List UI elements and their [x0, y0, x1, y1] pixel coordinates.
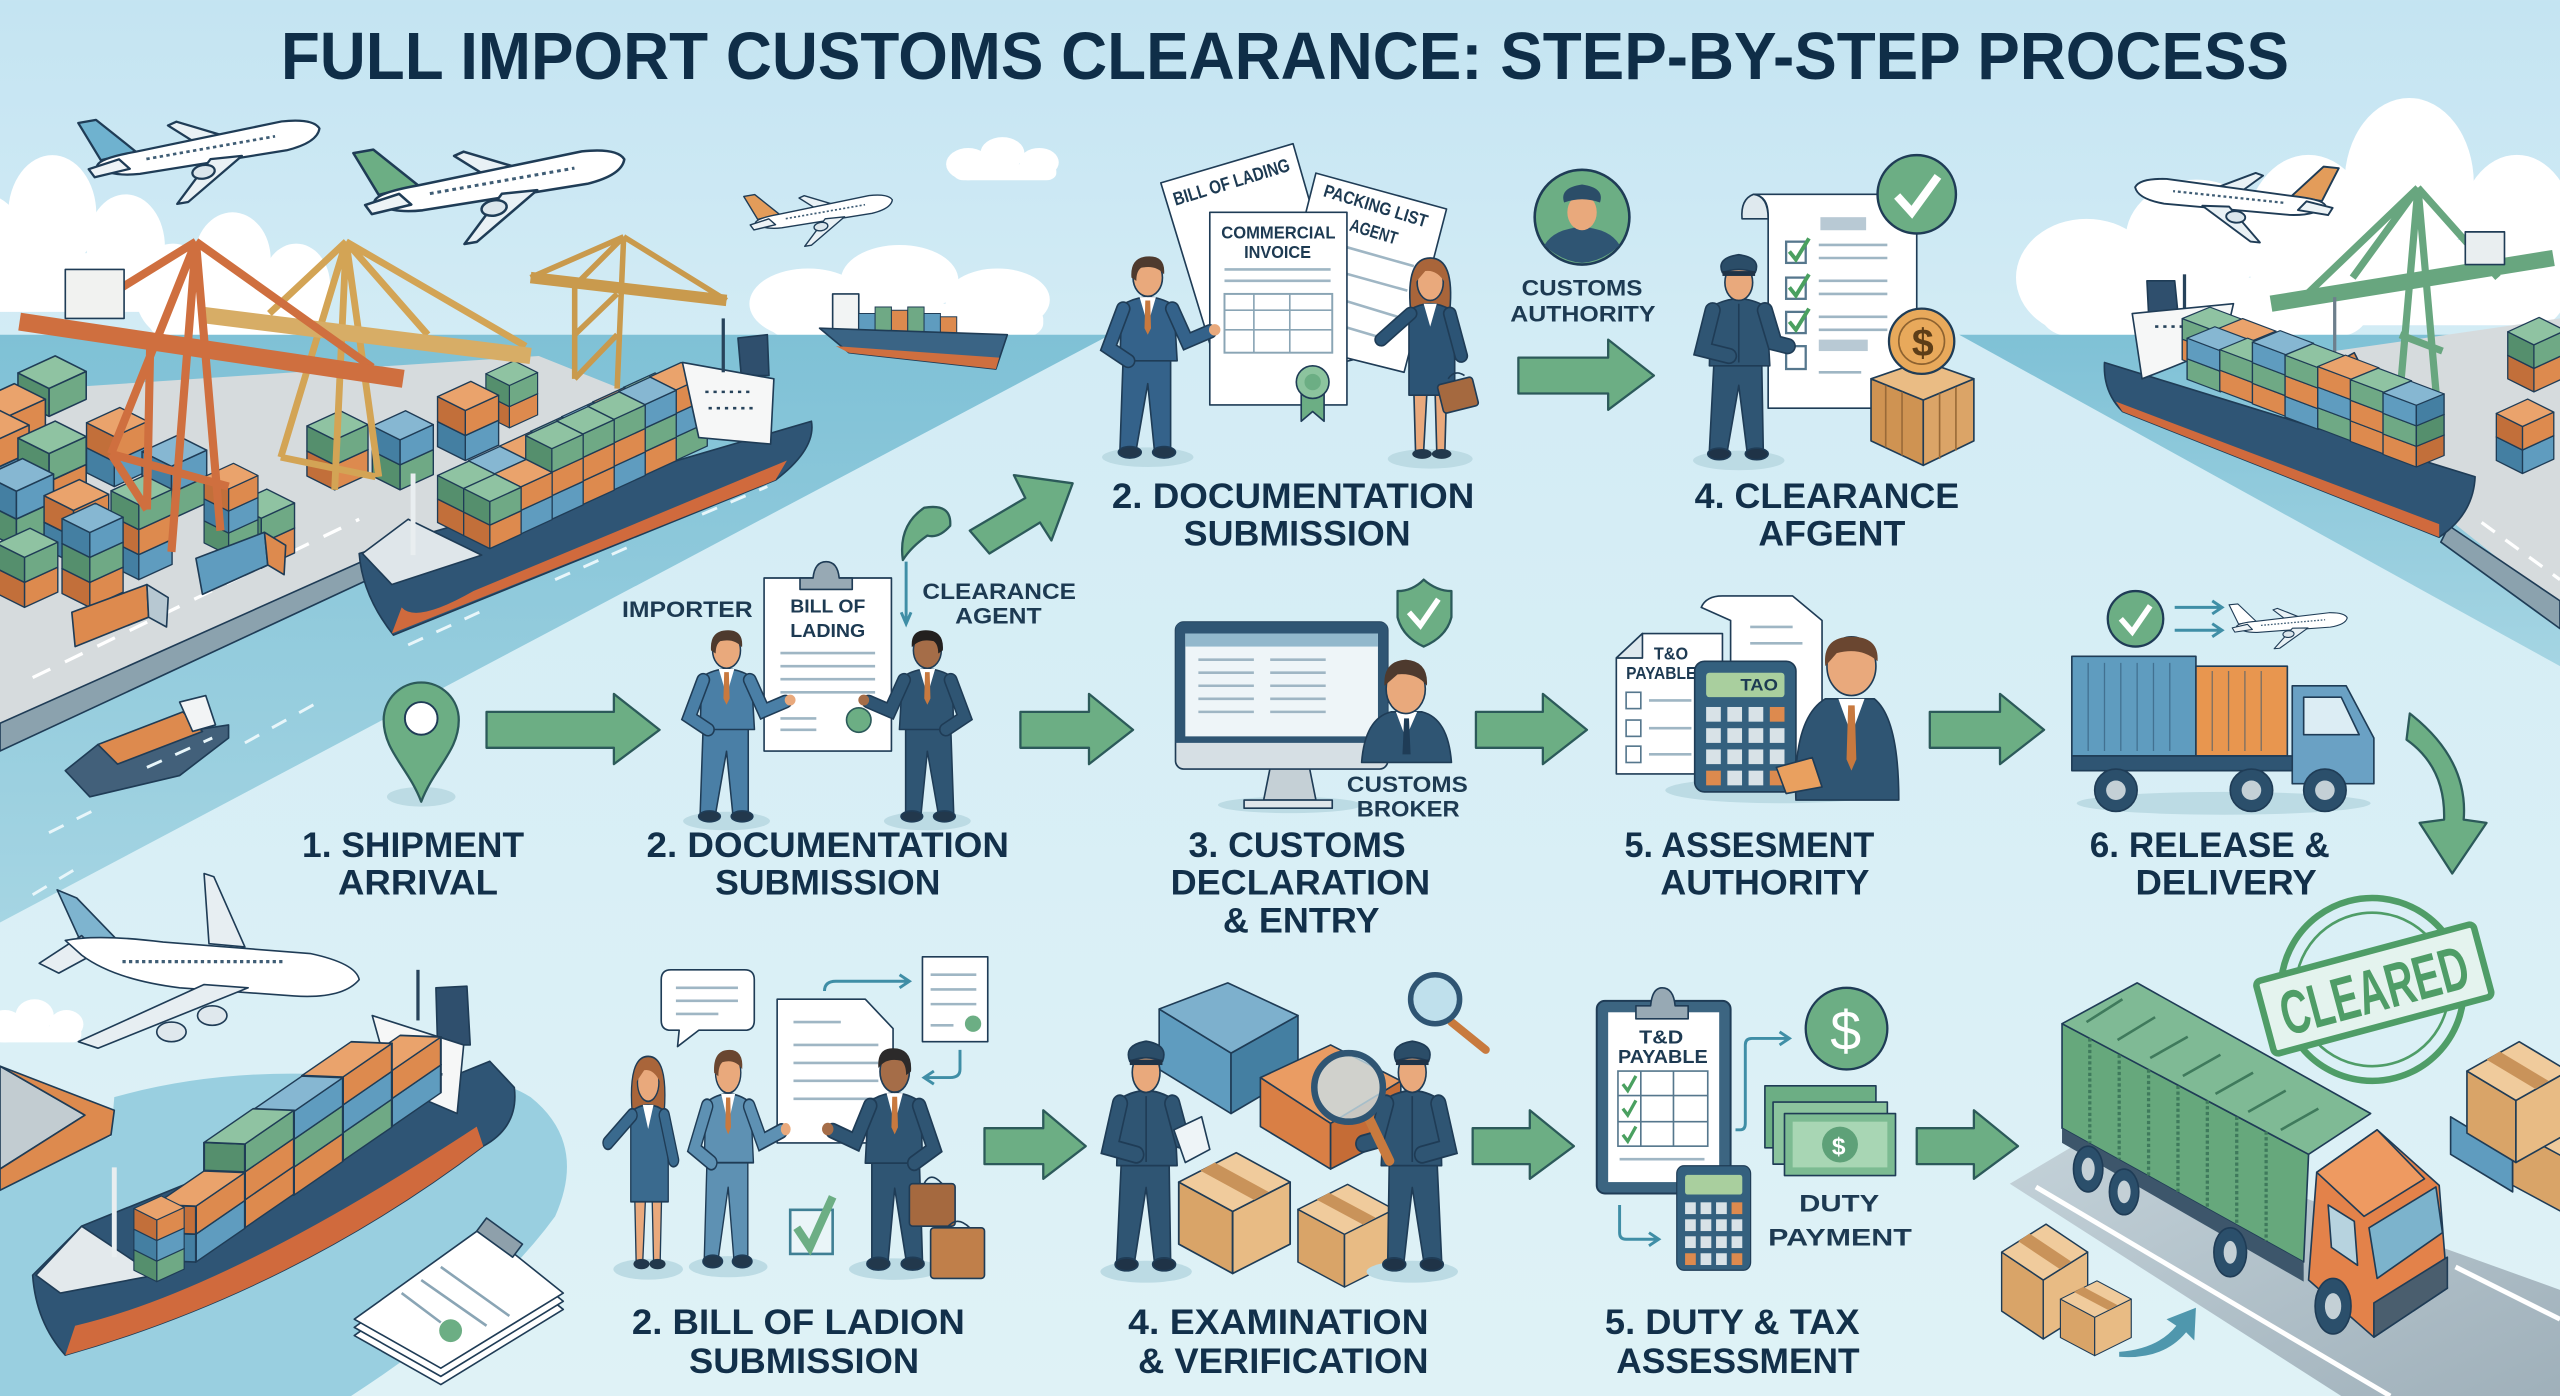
document: packing list: AGENT	[1347, 215, 1400, 248]
icon: banknotes	[1765, 1086, 1896, 1176]
document: T&O payable: T&O	[1654, 644, 1688, 664]
person: officer right	[1363, 1041, 1458, 1283]
label: 5 assesment authority: 5. ASSESMENT	[1624, 826, 1875, 865]
pier bottom left	[0, 1066, 114, 1190]
sea left	[0, 335, 1110, 922]
label: 5 duty and tax assessment	[1605, 1303, 1860, 1381]
icon: blue container	[1159, 983, 1298, 1114]
icon: flow arrows	[824, 975, 960, 1084]
distant ship	[820, 294, 1007, 369]
label: clearance agent: CLEARANCE	[922, 579, 1076, 604]
arrow	[1930, 694, 2044, 764]
icon: leaf with arrow	[901, 507, 950, 624]
ship: right	[2104, 274, 2475, 537]
icon: cardboard boxes	[1179, 1153, 1394, 1287]
arrow	[984, 1110, 1086, 1179]
person: woman	[608, 1056, 683, 1280]
label: customs broker: CUSTOMS	[1347, 772, 1468, 797]
icon: dollar coin: $	[1912, 322, 1934, 365]
label: 5 duty and tax assessment: 5. DUTY & TAX	[1605, 1303, 1860, 1342]
truck cab	[2309, 1130, 2447, 1337]
icon: banknotes: $	[1832, 1133, 1846, 1160]
icon: clipboard	[1174, 1117, 1210, 1162]
label: 3 customs declaration and entry: & ENTRY	[1223, 901, 1380, 940]
label: customs authority	[1510, 276, 1656, 327]
document: T&D payable clipboard: T&D	[1639, 1026, 1683, 1047]
icon: large magnifier	[1314, 1053, 1389, 1161]
customs authority badge	[1535, 170, 1629, 265]
icon: calculator	[1677, 1166, 1751, 1270]
icon: seal ribbon	[1296, 366, 1329, 421]
document: large sheet	[777, 999, 893, 1143]
crane: large yellow	[204, 242, 531, 490]
person: officer left	[1100, 1041, 1195, 1283]
crane: large orange	[20, 242, 403, 552]
document: small sheet	[922, 957, 988, 1042]
step: documentation submission middle	[622, 562, 1076, 830]
icon: briefcases	[909, 1177, 984, 1278]
road	[2010, 1127, 2560, 1396]
ship: main left	[359, 318, 812, 635]
crane: green	[2271, 188, 2553, 428]
stack of papers	[354, 1218, 563, 1385]
label: clearance agent: AGENT	[955, 604, 1042, 629]
icon: shield check	[1398, 580, 1451, 647]
label: customs authority: AUTHORITY	[1510, 302, 1656, 327]
label: duty payment	[1768, 1190, 1912, 1252]
cartons right	[2451, 1042, 2560, 1212]
step: examination and verification	[1100, 975, 1486, 1287]
document: bill of lading clipboard	[764, 562, 891, 751]
arrow	[1473, 1110, 1574, 1179]
person: woman	[1381, 258, 1473, 469]
label: 4 clearance agent	[1695, 477, 1959, 553]
label: 2 documentation submission: SUBMISSION	[715, 864, 940, 903]
icon: speech bubble	[661, 970, 754, 1047]
label: 6 release and delivery: DELIVERY	[2136, 864, 2317, 903]
cartons foreground	[2002, 1224, 2131, 1356]
truck chassis and wheels	[2062, 1128, 2304, 1282]
label: 2 documentation submission top	[1112, 477, 1474, 553]
document: bill of lading	[1161, 144, 1355, 392]
label: 3 customs declaration and entry: 3. CUSTOMS	[1189, 826, 1406, 865]
label: 4 clearance agent: 4. CLEARANCE	[1695, 477, 1959, 516]
document: bill of lading clipboard: BILL OF	[790, 595, 865, 616]
step: release truck	[2072, 656, 2374, 815]
icon: check circle and arrows	[2108, 591, 2222, 647]
label: 2 documentation submission: 2. DOCUMENTATION	[647, 826, 1009, 865]
airplane lower left	[39, 874, 359, 1048]
icon: calculator: TAO	[1740, 677, 1778, 695]
document: T&O payable	[1616, 634, 1722, 774]
document: commercial invoice: COMMERCIAL	[1221, 222, 1336, 242]
document: T&D payable clipboard: PAYABLE	[1618, 1046, 1708, 1067]
water ripples	[33, 487, 767, 895]
label: 2 bill of ladion submission: 2. BILL OF LADION	[632, 1303, 965, 1342]
label: 2 documentation submission	[647, 826, 1009, 903]
step: clearance agent	[1693, 155, 1974, 470]
document: back sheet	[1701, 596, 1822, 767]
document: commercial invoice	[1210, 212, 1347, 405]
label: 4 examination and verification	[1128, 1303, 1429, 1381]
label: 6 release and delivery	[2090, 826, 2330, 903]
person: assessor	[1776, 637, 1899, 800]
person: man	[1102, 256, 1220, 467]
icon: dollar circle	[1806, 988, 1887, 1069]
icon: calculator	[1695, 661, 1796, 792]
trailer	[2062, 983, 2371, 1262]
document: commercial invoice: INVOICE	[1244, 242, 1311, 262]
label: 1 shipment arrival	[302, 826, 525, 903]
document: packing list: PACKING LIST	[1321, 181, 1430, 231]
arrow	[1917, 1110, 2018, 1179]
label: 6 release and delivery: 6. RELEASE &	[2090, 826, 2330, 865]
person: customs officer	[1693, 255, 1788, 470]
label: customs broker	[1347, 772, 1468, 821]
sea right	[1959, 335, 2560, 666]
step: documentation submission (top)	[1102, 144, 1479, 469]
label: 2 documentation submission top: SUBMISSION	[1184, 514, 1411, 553]
clouds	[0, 98, 2560, 1042]
label: 5 assesment authority	[1624, 826, 1875, 903]
label: 2 documentation submission top: 2. DOCUMENTATION	[1112, 477, 1474, 516]
arrow	[1518, 340, 1654, 410]
airplanes	[78, 82, 2349, 652]
person: man	[689, 1050, 791, 1277]
container yard left	[0, 356, 538, 607]
icon: small magnifier	[1411, 975, 1486, 1050]
step: duty and tax assessment	[1597, 988, 1912, 1270]
label: 4 clearance agent: AFGENT	[1758, 514, 1906, 553]
label: 2 bill of ladion submission: SUBMISSION	[689, 1342, 919, 1381]
ship: lower left	[33, 970, 515, 1355]
trucks on quay	[72, 532, 286, 647]
document: checklist	[1742, 194, 1917, 408]
step: bill of lading submission	[608, 957, 988, 1280]
icon: check circle	[1878, 155, 1956, 234]
icon: location pin	[384, 682, 459, 807]
document: T&D payable clipboard	[1597, 988, 1731, 1194]
arrow	[487, 694, 660, 764]
crane: small yellow	[531, 237, 727, 389]
icon: dollar circle: $	[1830, 1000, 1861, 1062]
icon: crate	[1871, 361, 1974, 465]
person: navy suit	[822, 1048, 940, 1280]
label: 2 bill of ladion submission	[632, 1303, 965, 1381]
water blob bottom left	[0, 1071, 567, 1396]
label: importer: IMPORTER	[622, 597, 753, 622]
small ship lower left channel	[65, 696, 229, 797]
arrow: curved down	[2407, 714, 2487, 874]
arrow	[1020, 694, 1133, 764]
label: 3 customs declaration and entry: DECLARATION	[1171, 864, 1430, 903]
label: 1 shipment arrival: 1. SHIPMENT	[302, 826, 525, 865]
arrow	[1476, 694, 1587, 764]
document: packing list	[1273, 173, 1447, 372]
label: 5 assesment authority: AUTHORITY	[1660, 864, 1869, 903]
label: clearance agent	[922, 579, 1076, 629]
right yard containers	[2496, 317, 2560, 474]
stamp: cleared	[2241, 872, 2506, 1106]
arrow: diagonal up right	[970, 475, 1073, 554]
title: FULL IMPORT CUSTOMS CLEARANCE: STEP-BY-STEP PROCESS	[281, 19, 2289, 94]
person: clearance agent	[858, 630, 971, 830]
icon: orange container	[1260, 1045, 1401, 1169]
label: 3 customs declaration and entry	[1171, 826, 1430, 940]
icon: dollar coin	[1889, 309, 1954, 374]
right quay	[2335, 318, 2560, 629]
step: customs declaration	[1176, 580, 1468, 821]
label: customs broker: BROKER	[1357, 796, 1460, 821]
icon: monitor	[1176, 622, 1388, 813]
left quay	[0, 356, 702, 751]
label: 1 shipment arrival: ARRIVAL	[338, 864, 498, 903]
icon: flow arrows	[1620, 1032, 1789, 1246]
big green truck	[2062, 983, 2447, 1337]
label: duty payment: PAYMENT	[1768, 1225, 1912, 1252]
label: duty payment: DUTY	[1799, 1190, 1879, 1217]
step: assessment authority	[1616, 596, 1899, 803]
icon: check box	[790, 1197, 833, 1254]
label: 4 examination and verification: 4. EXAMINATION	[1128, 1303, 1429, 1342]
document: bill of lading: BILL OF LADING	[1171, 154, 1292, 210]
person: importer	[683, 630, 796, 830]
person: customs broker	[1362, 660, 1451, 762]
icon: briefcase	[1437, 373, 1479, 414]
arrow: teal curved	[2119, 1308, 2196, 1357]
label: 4 examination and verification: & VERIFICATION	[1138, 1342, 1429, 1381]
document: bill of lading clipboard: LADING	[790, 620, 865, 641]
label: customs authority: CUSTOMS	[1522, 276, 1642, 301]
label: 5 duty and tax assessment: ASSESSMENT	[1616, 1342, 1860, 1381]
document: T&O payable: PAYABLE	[1626, 663, 1696, 683]
